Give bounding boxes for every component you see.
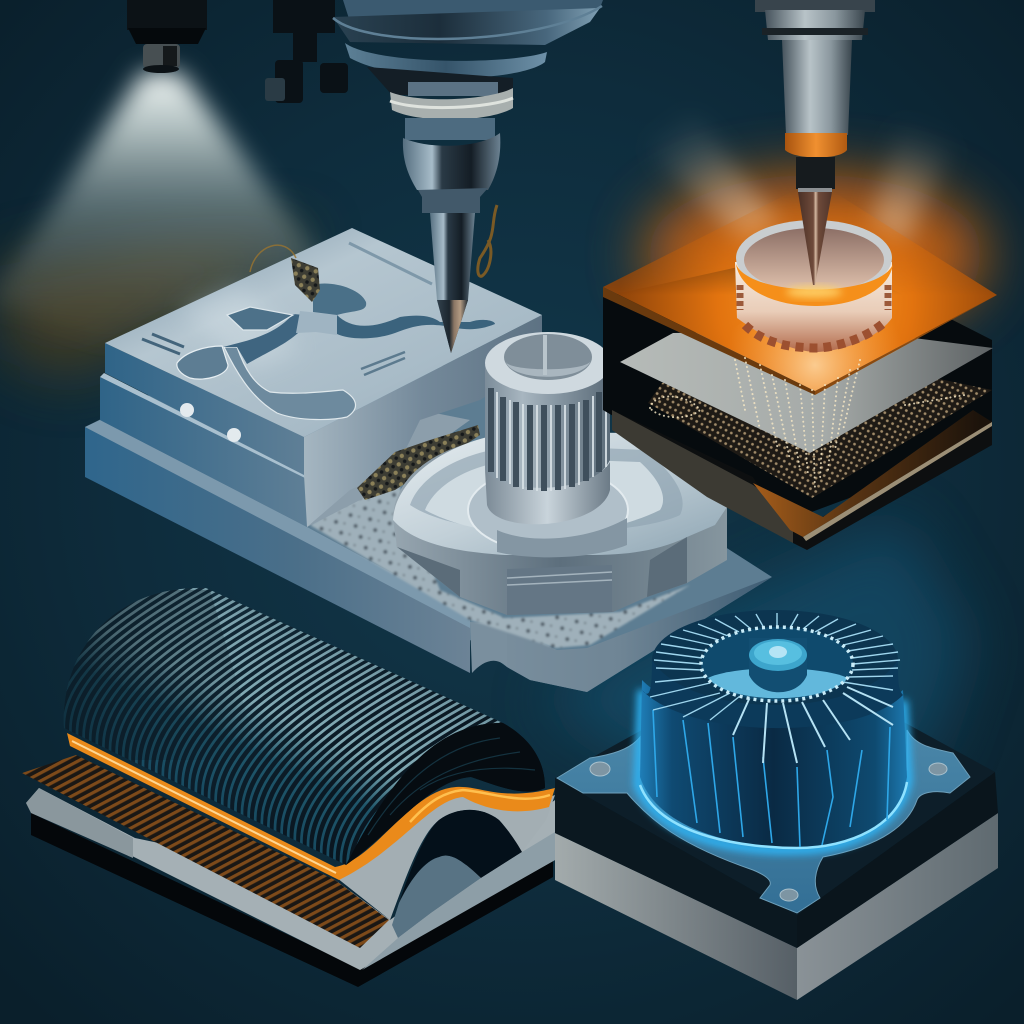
carbon strip xyxy=(22,755,389,948)
vertical fin edges xyxy=(653,710,890,847)
laser nozzle xyxy=(755,0,875,285)
inspection camera xyxy=(127,0,207,73)
grey plate xyxy=(620,330,993,453)
front recess xyxy=(497,518,627,557)
dome ridges xyxy=(64,588,500,864)
hub xyxy=(749,638,807,692)
splined cylinder xyxy=(485,332,611,524)
arch opening xyxy=(399,810,522,903)
flange bolts xyxy=(590,762,947,901)
heatsink flange xyxy=(557,730,970,913)
front block xyxy=(507,565,612,615)
black bottom layer xyxy=(31,813,553,987)
copper layer xyxy=(753,410,992,537)
glass ring xyxy=(390,88,513,120)
heatsink base block xyxy=(555,720,998,1000)
milled pocket: left lobe xyxy=(177,346,228,379)
arch floor xyxy=(362,832,555,970)
highlight on top face xyxy=(180,285,300,370)
orange band xyxy=(67,733,555,880)
mesh layer xyxy=(648,350,992,498)
teal glow behind heatsink xyxy=(540,520,970,770)
cup brown speckle xyxy=(745,322,885,348)
milled pocket: upper lobe xyxy=(313,284,366,315)
carbon fibre layup stack xyxy=(22,733,555,987)
machined block lower tier xyxy=(100,377,470,527)
base plate of machined block xyxy=(85,300,772,692)
spline highlights xyxy=(497,388,606,491)
milled pocket: wall xyxy=(296,311,337,335)
rim glow line xyxy=(640,782,907,848)
collar xyxy=(485,462,610,524)
melt cup xyxy=(735,220,893,352)
powder sparks below plate xyxy=(650,358,965,490)
cup side speckle xyxy=(740,285,888,310)
milled pocket: box xyxy=(227,307,293,330)
inner hub ring xyxy=(468,468,628,552)
slots on top face xyxy=(142,334,184,354)
machined block upper tier xyxy=(100,228,542,527)
ambient orange streak, left xyxy=(0,230,320,380)
pale light rays xyxy=(640,110,960,245)
metal chips on block and part xyxy=(291,258,480,500)
grey middle layer xyxy=(26,788,555,970)
orange glow behind additive plate xyxy=(645,175,985,335)
carbon fibre dome xyxy=(64,588,545,865)
glow ring xyxy=(638,690,908,850)
inner ring glow xyxy=(701,627,853,701)
outer fin disc xyxy=(652,610,898,710)
milled pocket: left channel xyxy=(223,314,305,364)
orange swarf near block xyxy=(250,245,296,272)
radial fins xyxy=(650,613,900,720)
heatsink finned body xyxy=(638,610,908,850)
flanged round part xyxy=(393,432,727,615)
arch support xyxy=(337,790,555,920)
notch face xyxy=(470,622,507,673)
slot right xyxy=(361,352,405,375)
long front fins xyxy=(733,687,893,763)
milled pocket: lower channel xyxy=(224,347,356,420)
milled pocket: channel to tool xyxy=(337,315,495,338)
grit scattered on base plate xyxy=(310,475,690,648)
inner well xyxy=(701,627,853,701)
additive layer stack xyxy=(603,180,997,550)
spindle bracket xyxy=(265,0,348,103)
light cone from inspection camera xyxy=(0,72,330,345)
recessed ring of flange xyxy=(410,445,683,532)
spiral swarf near tool xyxy=(478,205,497,276)
milling spindle xyxy=(333,0,603,353)
orange top plate xyxy=(603,203,997,391)
arch hump and wall xyxy=(392,856,481,938)
slot back xyxy=(349,243,432,284)
dome end face xyxy=(346,723,545,865)
spline grooves xyxy=(491,388,599,491)
left metal strip xyxy=(612,410,793,543)
cup rim orange xyxy=(736,264,893,306)
small bumps xyxy=(180,403,194,417)
